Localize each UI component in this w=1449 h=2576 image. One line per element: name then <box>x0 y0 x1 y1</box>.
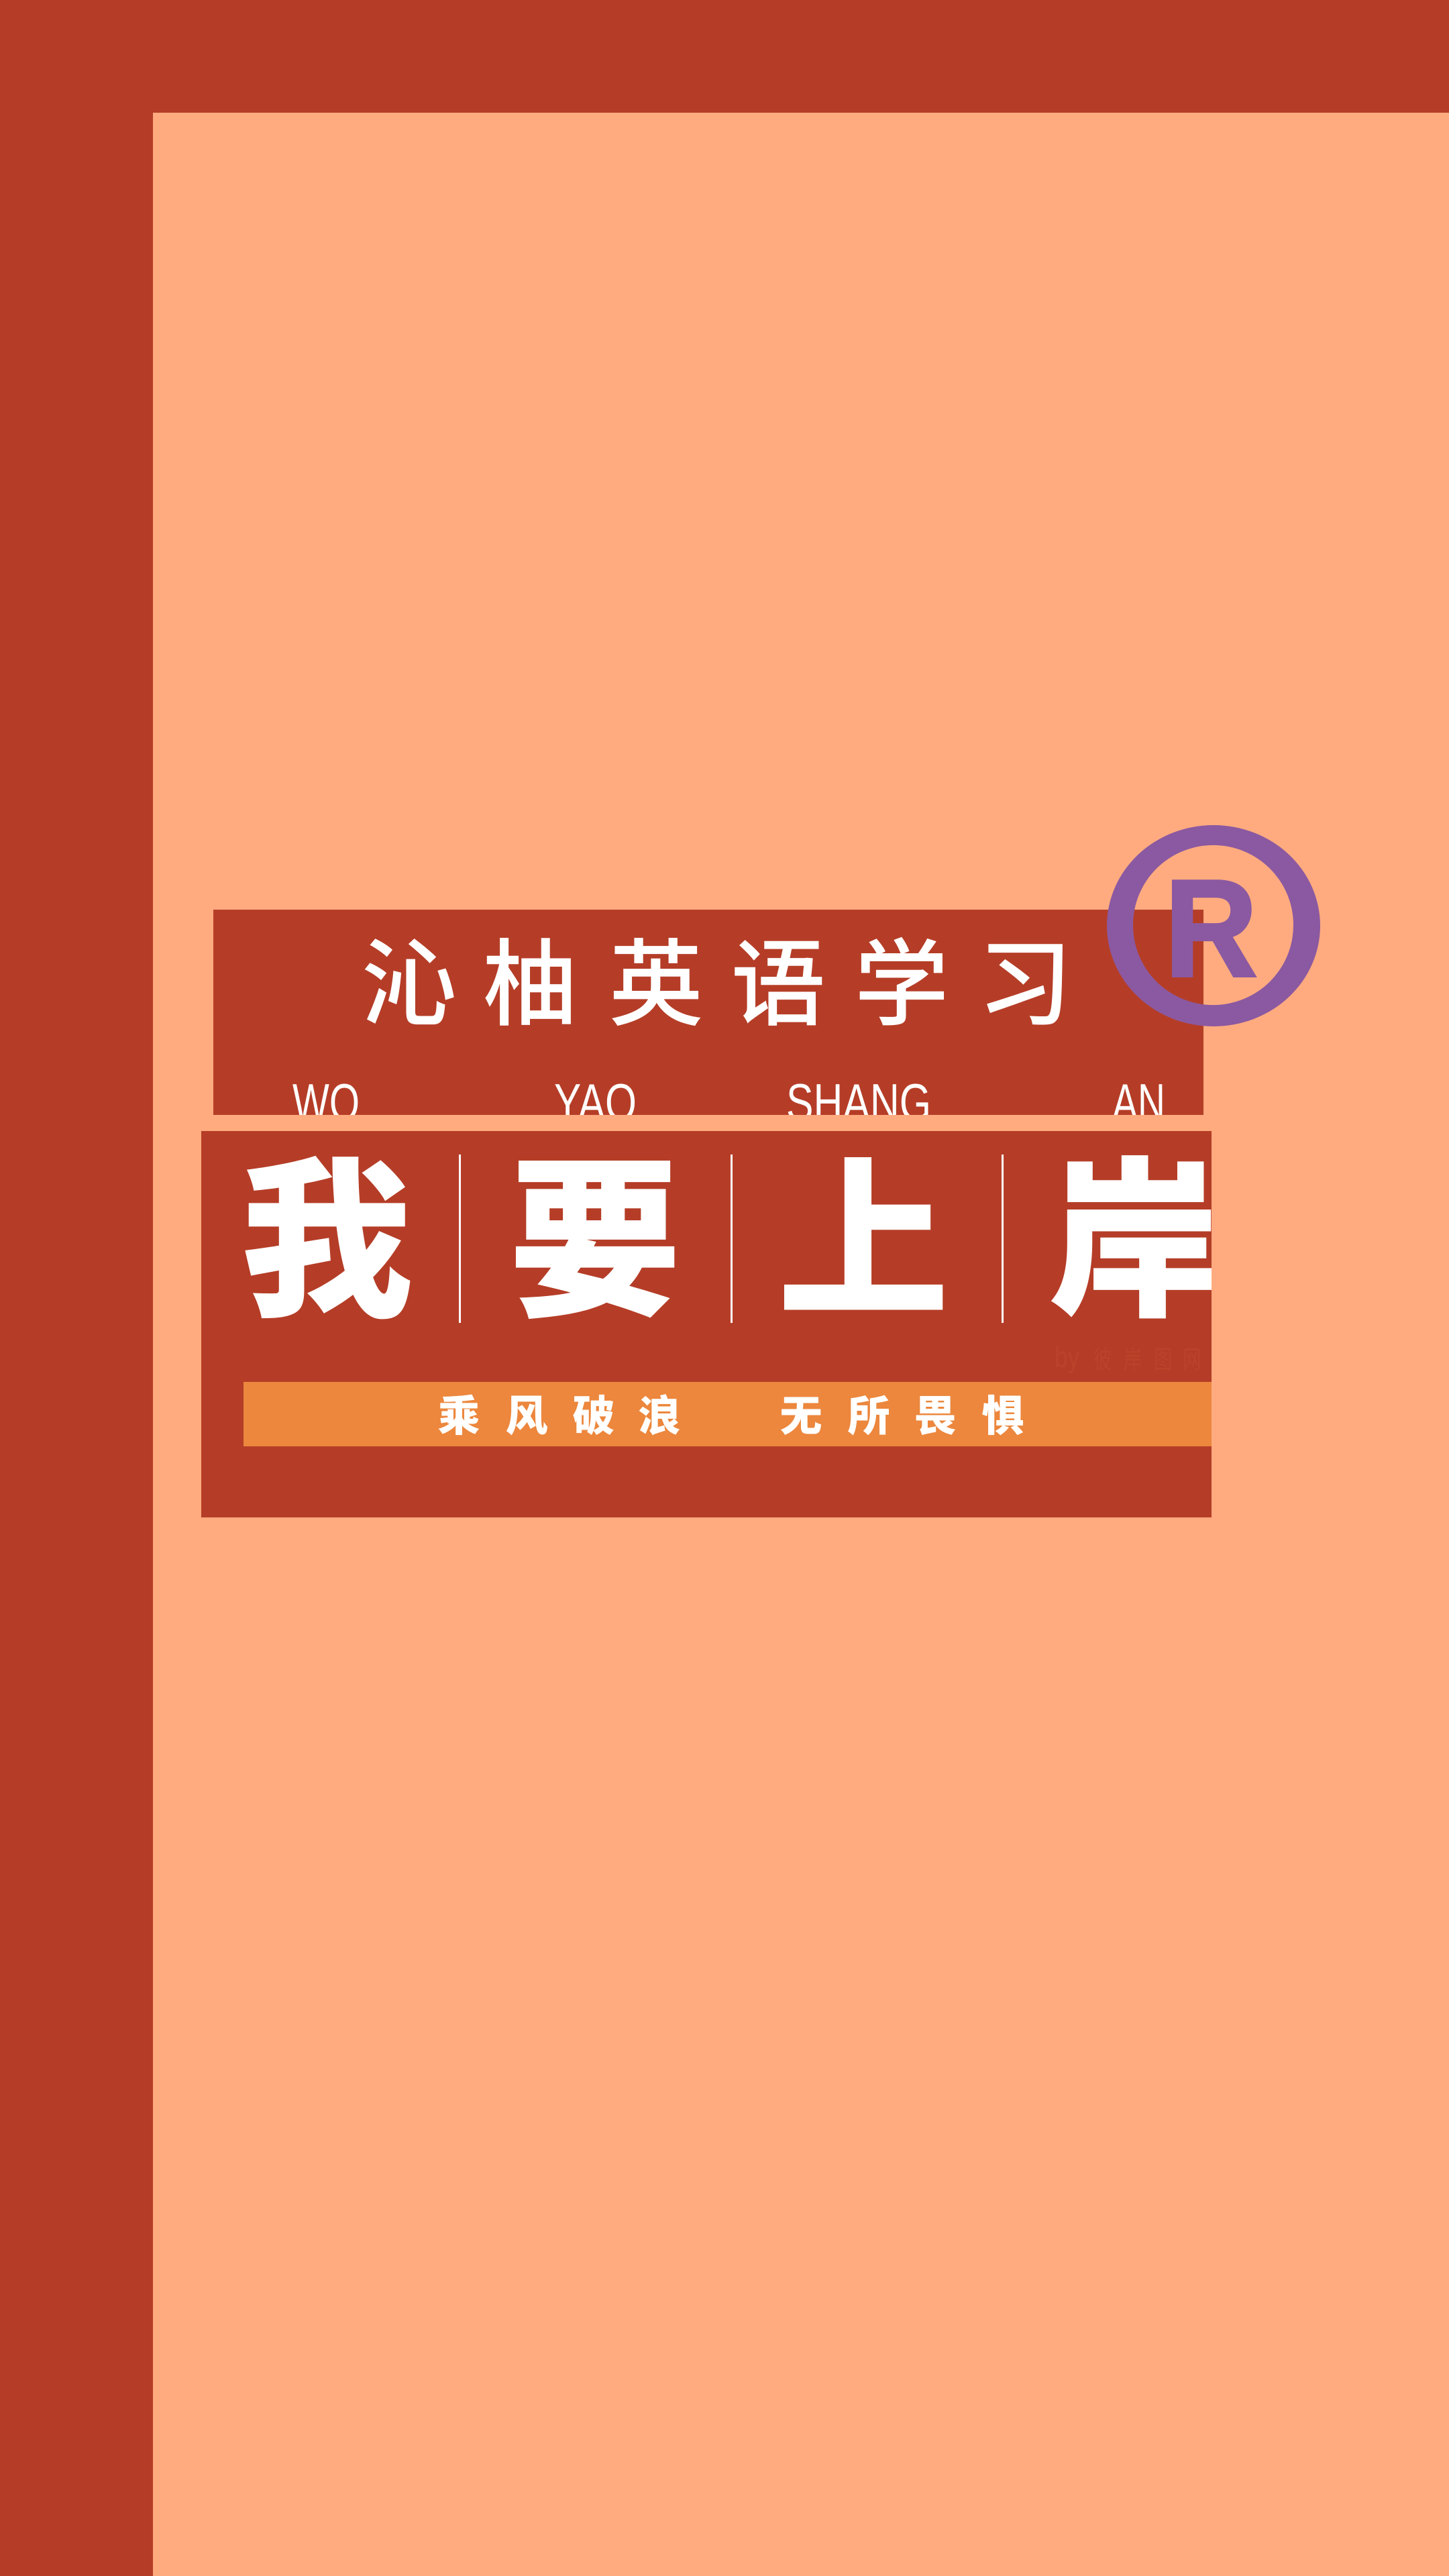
panel: brand header <box>213 910 1203 1132</box>
watermark: 图 <box>1154 1346 1172 1375</box>
icon: registered mark: R <box>1165 852 1257 1006</box>
pinyin labels: SHANG <box>786 1073 931 1132</box>
panel: main slogan <box>201 1131 1220 1517</box>
watermark: 岸 <box>1124 1346 1142 1375</box>
heading: brand name: 沁柚英语学习 <box>362 932 1073 1038</box>
watermark <box>1055 1341 1201 1375</box>
tagline bar <box>244 1382 1212 1446</box>
top band <box>0 0 1449 113</box>
tagline text: 乘风破浪无所畏惧 <box>437 1393 1024 1440</box>
watermark: 彼 <box>1093 1346 1112 1375</box>
left band <box>0 0 153 2576</box>
pinyin labels: YAO <box>554 1073 637 1132</box>
watermark: 网 <box>1183 1346 1201 1375</box>
watermark: by <box>1055 1341 1079 1374</box>
pinyin labels: WO <box>292 1073 360 1132</box>
heading: main title: 我要上岸 <box>241 1147 1220 1339</box>
pinyin labels: AN <box>1112 1073 1165 1132</box>
icon: registered mark <box>1107 825 1320 1026</box>
pinyin labels <box>292 1084 1162 1115</box>
